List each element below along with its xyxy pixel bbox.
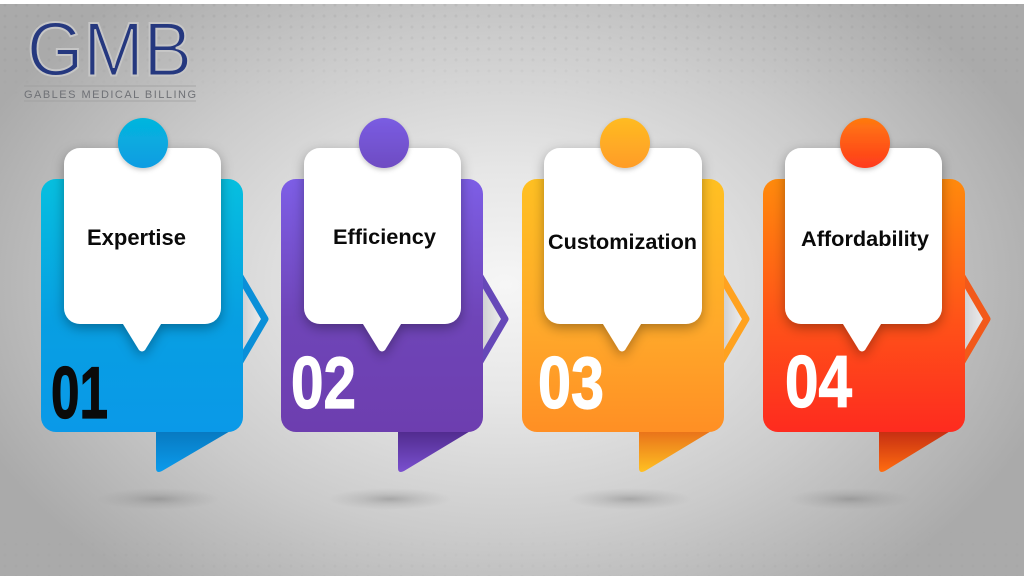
white speech card — [785, 148, 942, 352]
panel: step 3 Customization — [522, 118, 746, 510]
white speech card — [64, 148, 221, 352]
tail — [398, 430, 472, 472]
floor shadow — [568, 488, 692, 510]
floor shadow — [328, 488, 452, 510]
panel: step 4 Affordability — [763, 118, 987, 510]
dot — [118, 118, 168, 168]
arrow chevron — [238, 273, 265, 365]
tail — [879, 430, 952, 472]
arrow chevron — [960, 273, 987, 365]
dot — [840, 118, 890, 168]
tail — [156, 430, 232, 472]
logo tagline: GABLES MEDICAL BILLING — [24, 89, 196, 101]
arrow chevron — [719, 273, 746, 365]
arrow chevron — [478, 273, 505, 365]
number: 01 — [51, 353, 108, 434]
tail — [639, 430, 713, 472]
number: 04 — [785, 342, 852, 423]
number: 02 — [291, 343, 356, 424]
coloured card — [281, 179, 483, 432]
label: Affordability — [801, 226, 929, 251]
label: Customization — [548, 229, 697, 254]
label: Expertise — [87, 225, 186, 250]
white speech card — [304, 148, 461, 352]
logo mark letters: GMB — [27, 8, 192, 92]
coloured card — [763, 179, 965, 432]
logo: GMB Gables Medical Billing — [24, 8, 196, 101]
panel: step 1 Expertise — [41, 118, 265, 510]
dot — [359, 118, 409, 168]
dot — [600, 118, 650, 168]
coloured card — [41, 179, 243, 432]
panel: step 2 Efficiency — [281, 118, 505, 510]
coloured card — [522, 179, 724, 432]
white speech card — [544, 148, 702, 352]
label: Efficiency — [333, 225, 436, 249]
floor shadow — [96, 488, 220, 510]
floor shadow — [788, 488, 912, 510]
number: 03 — [538, 343, 604, 424]
